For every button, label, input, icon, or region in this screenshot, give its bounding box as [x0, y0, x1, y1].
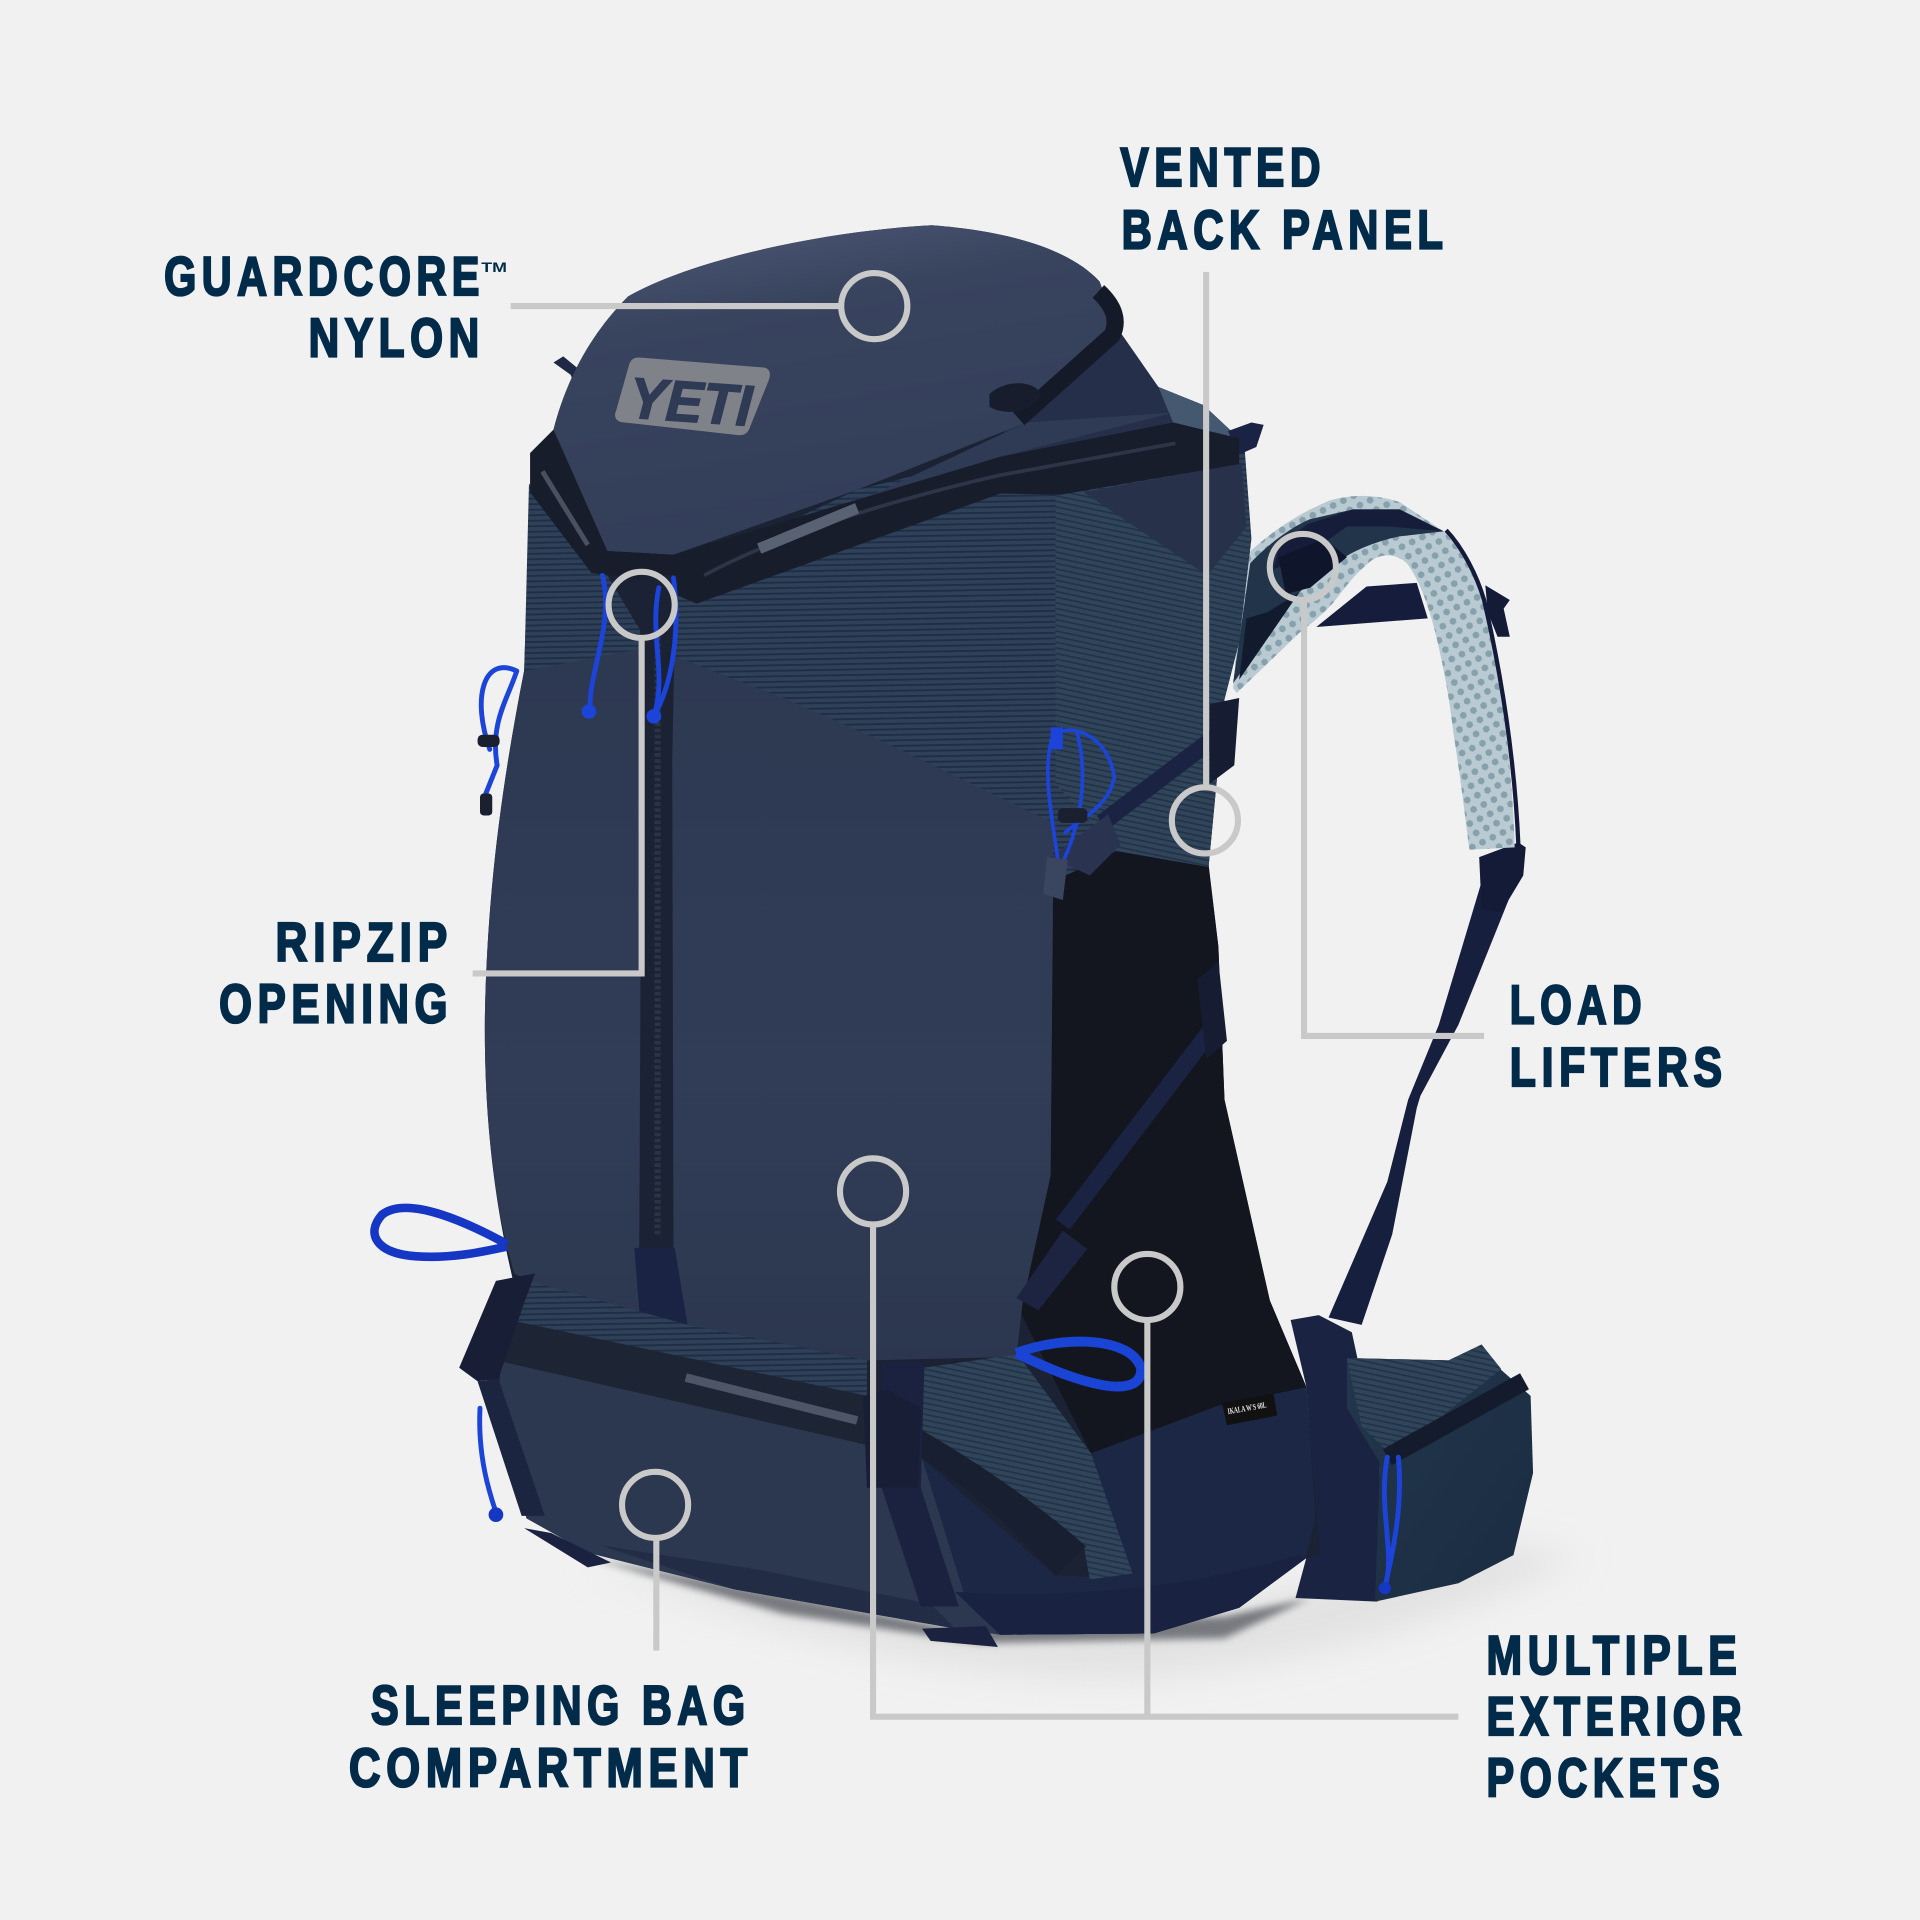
- side pocket label: IKALA W'S 60L: [1227, 1400, 1267, 1416]
- callout: Guardcore nylon: NYLON: [309, 306, 485, 368]
- rear lid section: [1004, 331, 1264, 478]
- front panel: [485, 649, 1053, 1360]
- callout: vented back panel: BACK PANEL: [1122, 199, 1449, 261]
- lid pocket zipper: [989, 291, 1115, 419]
- ground shadow: [588, 1543, 1580, 1678]
- callout: multiple exterior pockets: MULTIPLE: [1487, 1624, 1742, 1686]
- hip belt pocket: [1291, 1315, 1533, 1602]
- front straps and buckles: [459, 1273, 998, 1647]
- callout: Guardcore nylon: TM: [481, 260, 507, 275]
- callout: load lifters: [1270, 534, 1728, 1098]
- backpack illustration: [374, 225, 1533, 1647]
- logo: YETI: YETI: [627, 367, 755, 439]
- shoulder strap: [1233, 496, 1526, 1325]
- blue cords and pulls: [478, 576, 1391, 1594]
- callout: sleeping bag compartment: SLEEPING BAG: [371, 1674, 751, 1736]
- striped upper mesh panel: [524, 441, 1251, 882]
- callout: load lifters: LOAD: [1510, 974, 1647, 1036]
- callout: multiple exterior pockets: [840, 1158, 1747, 1808]
- blue webbing loops: [374, 1208, 1141, 1387]
- callout: sleeping bag compartment: COMPARTMENT: [349, 1737, 753, 1799]
- side pocket label: [1222, 1393, 1277, 1425]
- callout: multiple exterior pockets: POCKETS: [1487, 1746, 1725, 1808]
- main zipper seam: [530, 422, 1239, 604]
- callout: RipZip opening: OPENING: [219, 972, 453, 1034]
- callout: RipZip opening: RIPZIP: [276, 911, 453, 973]
- bag base silhouette: [481, 225, 1320, 1635]
- callout: sleeping bag compartment: [349, 1472, 753, 1799]
- vertical front zipper: [634, 576, 688, 1329]
- small lid loop: [553, 356, 584, 387]
- callout: vented back panel: VENTED: [1120, 136, 1326, 198]
- callout: Guardcore nylon: GUARDCORE: [164, 245, 485, 307]
- lower sleeping bag compartment: [496, 1281, 1315, 1635]
- black mesh back panel: [1016, 849, 1307, 1453]
- callout: Guardcore nylon: [164, 245, 907, 368]
- top lid in nylon: [553, 225, 1173, 555]
- callout: vented back panel: [1120, 136, 1449, 853]
- side compression straps: [1016, 698, 1239, 1310]
- callout: RipZip opening: [219, 572, 675, 1034]
- callout: load lifters: LIFTERS: [1510, 1036, 1728, 1098]
- callout: multiple exterior pockets: EXTERIOR: [1487, 1685, 1747, 1747]
